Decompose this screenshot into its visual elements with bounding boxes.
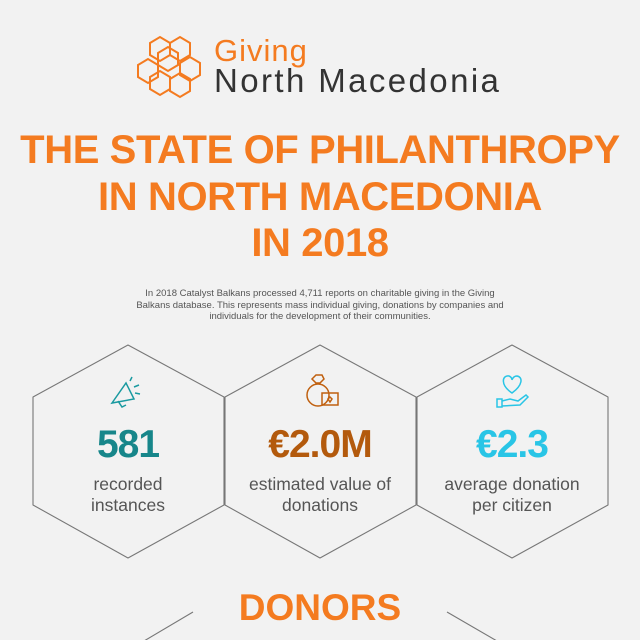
label: per citizen (472, 495, 552, 515)
panel: average donation (444, 375, 580, 515)
icon: megaphone (110, 376, 140, 408)
panel: estimated value (249, 374, 391, 515)
label (91, 474, 165, 515)
heading: donors: DONORS (239, 587, 401, 628)
title: IN NORTH MACEDONIA (98, 174, 542, 218)
icon: hexagon logo (137, 36, 201, 98)
number: €2.3 (476, 423, 548, 466)
logo: North Macedonia (214, 62, 501, 99)
label: instances (91, 495, 165, 515)
label: recorded (93, 474, 163, 494)
label: estimated value of (249, 474, 391, 494)
number: 581 (97, 423, 159, 466)
icon: money bag (306, 374, 339, 407)
title: IN 2018 (251, 221, 389, 265)
title: THE STATE OF PHILANTHROPY (20, 128, 620, 172)
logo (137, 33, 501, 99)
intro text: Balkans database. This represents mass individual giving, donations by companies and individuals for the development of their communities. (136, 300, 504, 322)
intro text: In 2018 Catalyst Balkans processed 4,711 reports on charitable giving in the Giving (145, 288, 495, 299)
panel: recorded instances (91, 376, 165, 515)
icon: heart in hand (496, 375, 529, 408)
label (444, 474, 580, 515)
logo text: Giving (214, 33, 308, 68)
label: donations (282, 495, 358, 515)
label: average donation (444, 474, 580, 494)
label (249, 474, 391, 515)
title (20, 128, 620, 265)
intro text (136, 288, 504, 322)
number: €2.0M (268, 423, 372, 466)
